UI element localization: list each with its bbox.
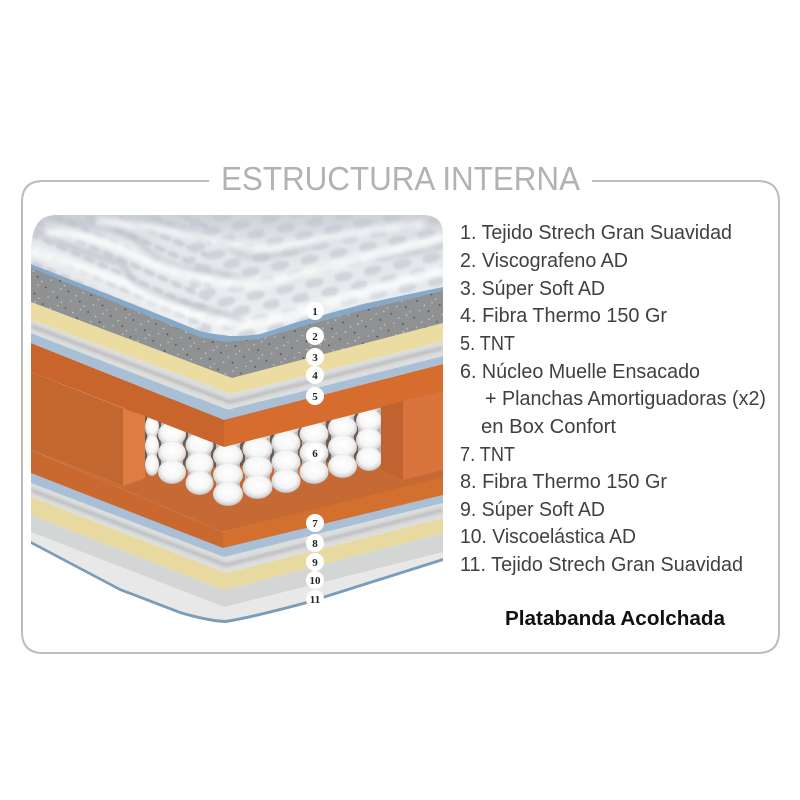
item 3: 3. Súper Soft AD (460, 278, 605, 300)
badge 10 (306, 571, 324, 589)
number badges (306, 302, 324, 608)
layer 3: super soft (31, 302, 443, 394)
blue edge of top fabric (31, 263, 443, 342)
item 7: 7. TNT (460, 444, 515, 466)
panel frame (22, 181, 779, 653)
item 2: 2. Viscografeno AD (460, 250, 628, 272)
badge 7: 7 (312, 518, 318, 530)
badge 2: 2 (312, 331, 318, 343)
layer 8: thermo fibre (31, 483, 443, 573)
badge 11 (306, 590, 324, 608)
badge 9: 9 (312, 557, 318, 569)
badge 4: 4 (312, 370, 318, 382)
pocket springs (145, 408, 381, 506)
badge 1 (306, 302, 324, 320)
item 11: 11. Tejido Strech Gran Suavidad (460, 554, 743, 576)
item 6 line 3: en Box Confort (481, 416, 616, 438)
badge 5: 5 (312, 391, 318, 403)
badge 5 (306, 387, 324, 405)
item 5: 5. TNT (460, 333, 515, 355)
item 6 line 2: + Planchas Amortiguadoras (x2) (485, 388, 766, 410)
spring core backing (124, 397, 358, 490)
left foam block (31, 372, 145, 486)
badge 11: 11 (310, 594, 320, 606)
badge 6 (306, 444, 324, 462)
badge 9 (306, 553, 324, 571)
badge 4 (306, 366, 324, 384)
layer list (460, 222, 766, 576)
badge 2 (306, 327, 324, 345)
item 8: 8. Fibra Thermo 150 Gr (460, 471, 667, 493)
upper comfort plate (31, 343, 443, 447)
layer 9: super soft (31, 497, 443, 590)
layer 5: TNT (31, 333, 443, 420)
right foam block (381, 391, 443, 480)
badge 10: 10 (310, 575, 321, 587)
layer 2: viscografeno (31, 266, 443, 378)
item 9: 9. Súper Soft AD (460, 499, 605, 521)
badge 8 (306, 534, 324, 552)
side panel note: Platabanda Acolchada (505, 608, 726, 630)
lower comfort plate (31, 450, 443, 548)
badge 7 (306, 514, 324, 532)
badge 3: 3 (312, 352, 318, 364)
layer 1: quilted top fabric (31, 215, 443, 345)
item 4: 4. Fibra Thermo 150 Gr (460, 305, 667, 327)
layer 11: bottom fabric (31, 532, 443, 623)
badge 3 (306, 348, 324, 366)
layer 4: thermo fibre (31, 320, 443, 410)
layer 7: TNT (31, 473, 443, 557)
badge 1: 1 (312, 306, 318, 318)
item 1: 1. Tejido Strech Gran Suavidad (460, 222, 732, 244)
title: ESTRUCTURA INTERNA (221, 160, 580, 197)
layer 10: viscoelastic (31, 515, 443, 607)
item 10: 10. Viscoelástica AD (460, 526, 636, 548)
mattress cross-section illustration (31, 215, 443, 623)
badge 6: 6 (312, 448, 318, 460)
item 6: 6. Núcleo Muelle Ensacado (460, 361, 700, 383)
badge 8: 8 (312, 538, 318, 550)
